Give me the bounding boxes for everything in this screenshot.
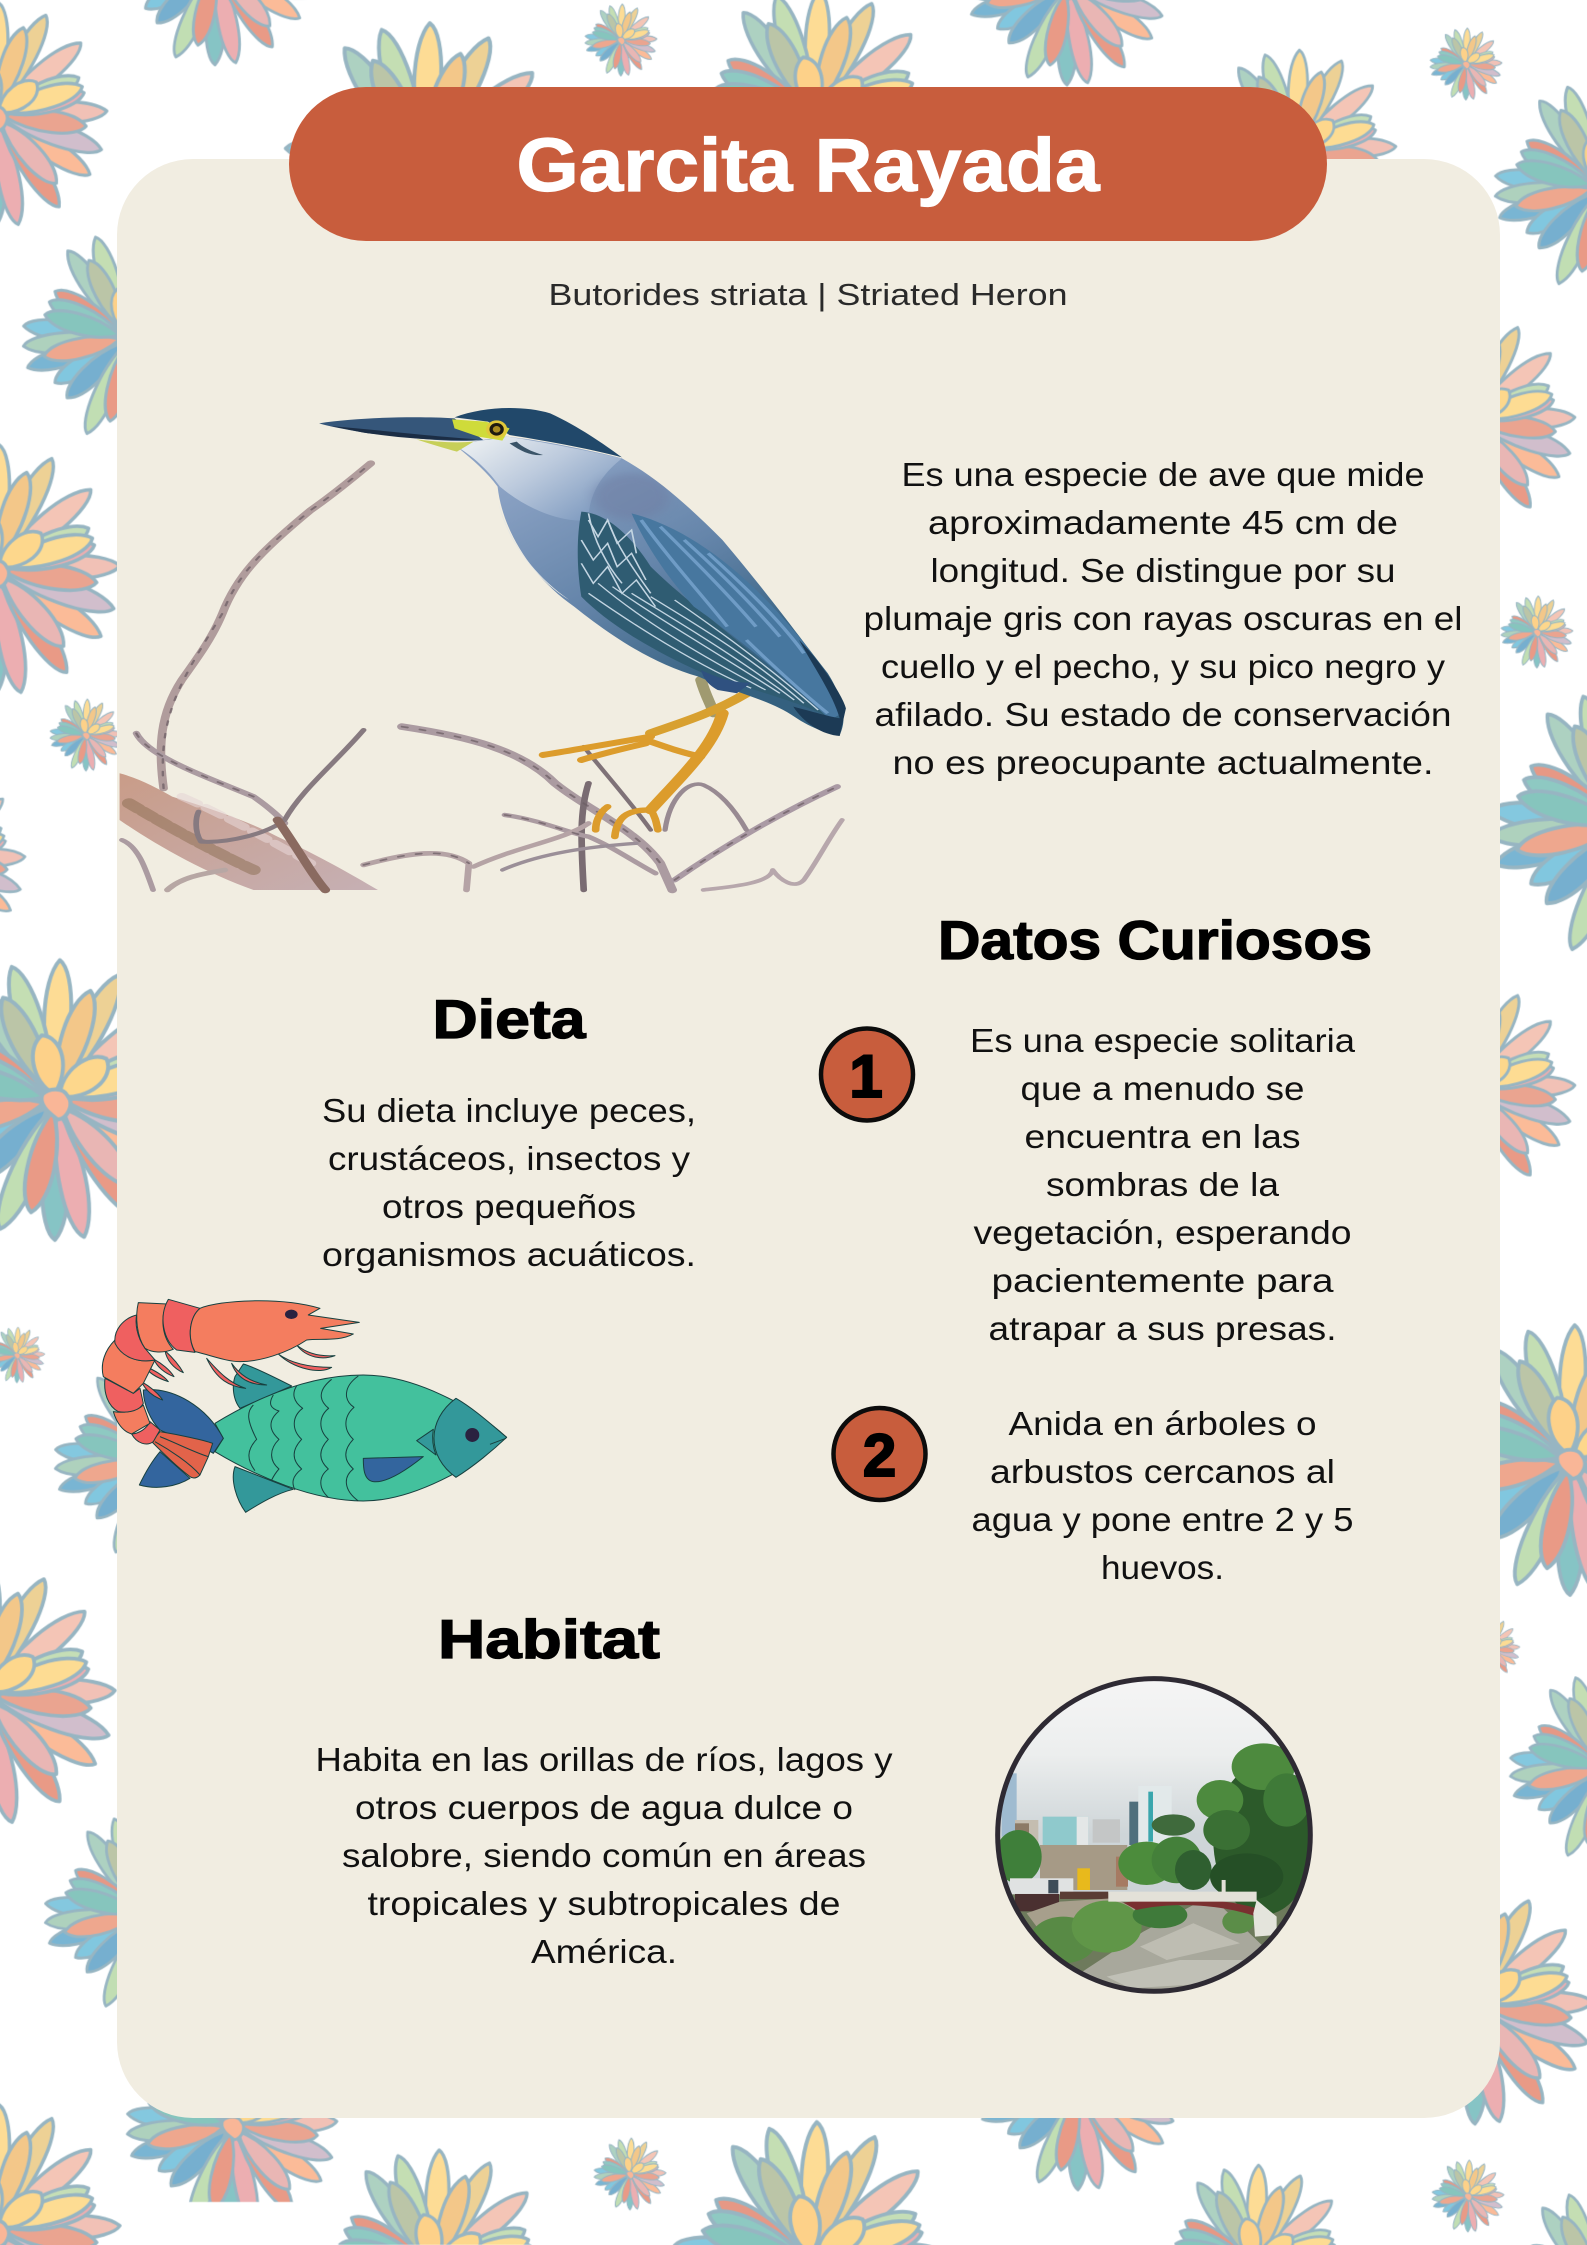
number badge 1: 1 — [849, 1043, 883, 1110]
feather streaks — [581, 513, 818, 710]
curious fact 1 text: vegetación, esperando — [974, 1214, 1352, 1251]
heading: Datos Curiosos: Datos Curiosos — [938, 909, 1372, 971]
habitat text: América. — [531, 1933, 677, 1970]
curious fact 2 text: agua y pone entre 2 y 5 — [972, 1501, 1354, 1538]
belly stripe — [499, 503, 569, 600]
curious fact 2 text: arbustos cercanos al — [990, 1453, 1335, 1490]
curious fact 2 text: huevos. — [1101, 1549, 1224, 1586]
curious fact 1 text: pacientemente para — [992, 1262, 1334, 1299]
number badge 1 — [821, 1028, 913, 1120]
curious fact 1 text — [970, 1022, 1356, 1347]
curious fact 2 text — [972, 1405, 1354, 1586]
curious fact 1 text: atrapar a sus presas. — [988, 1310, 1336, 1347]
intro description text: plumaje gris con rayas oscuras en el — [864, 600, 1462, 637]
number badge 2 — [834, 1408, 926, 1500]
mauve shoulder — [593, 473, 670, 520]
yellow lore and eye — [452, 419, 510, 441]
panel: main content card — [117, 159, 1500, 2118]
curious fact 1 text: que a menudo se — [1020, 1070, 1304, 1107]
intro description text: cuello y el pecho, y su pico negro y — [881, 648, 1446, 685]
curious fact 1 text: sombras de la — [1046, 1166, 1280, 1203]
intro description text: aproximadamente 45 cm de — [928, 504, 1398, 541]
bird body — [455, 437, 844, 735]
diet text: organismos acuáticos. — [322, 1236, 696, 1273]
illustration: heron on branches — [120, 408, 846, 890]
intro description text: Es una especie de ave que mide — [902, 456, 1424, 493]
bill — [319, 417, 483, 441]
title banner — [289, 87, 1327, 241]
intro description text: no es preocupante actualmente. — [892, 744, 1434, 781]
fish — [139, 1364, 507, 1512]
diet text — [322, 1092, 696, 1273]
heading: Habitat: Habitat — [438, 1608, 660, 1670]
curious fact 2 text: Anida en árboles o — [1008, 1405, 1316, 1442]
diet text: otros pequeños — [382, 1188, 636, 1225]
heading: Dieta: Dieta — [432, 988, 586, 1050]
circular habitat scene: river, bridge and city — [993, 1673, 1317, 1997]
habitat text: Habita en las orillas de ríos, lagos y — [316, 1741, 893, 1778]
diet text: crustáceos, insectos y — [328, 1140, 691, 1177]
neck and throat — [455, 437, 622, 521]
intro description text: afilado. Su estado de conservación — [874, 696, 1452, 733]
shrimp — [102, 1299, 359, 1444]
illustration: shrimp and fish — [102, 1299, 507, 1512]
crown — [455, 408, 622, 457]
curious fact 1 text: encuentra en las — [1024, 1118, 1300, 1155]
wing tip — [793, 640, 846, 736]
habitat text — [316, 1741, 893, 1970]
branches — [120, 463, 842, 890]
legs and feet — [543, 680, 746, 837]
diet text: Su dieta incluye peces, — [322, 1092, 696, 1129]
title banner: Garcita Rayada — [516, 123, 1101, 207]
habitat text: otros cuerpos de agua dulce o — [355, 1789, 853, 1826]
blue primaries — [632, 513, 842, 720]
dark covert feathers — [578, 512, 828, 717]
curious fact 1 text: Es una especie solitaria — [970, 1022, 1356, 1059]
subtitle: scientific and common name: Butorides striata | Striated Heron — [548, 277, 1068, 312]
intro description text — [864, 456, 1462, 781]
intro description text: longitud. Se distingue por su — [930, 552, 1396, 589]
habitat text: salobre, siendo común en áreas — [342, 1837, 866, 1874]
number badge 2: 2 — [863, 1422, 896, 1489]
habitat text: tropicales y subtropicales de — [368, 1885, 840, 1922]
